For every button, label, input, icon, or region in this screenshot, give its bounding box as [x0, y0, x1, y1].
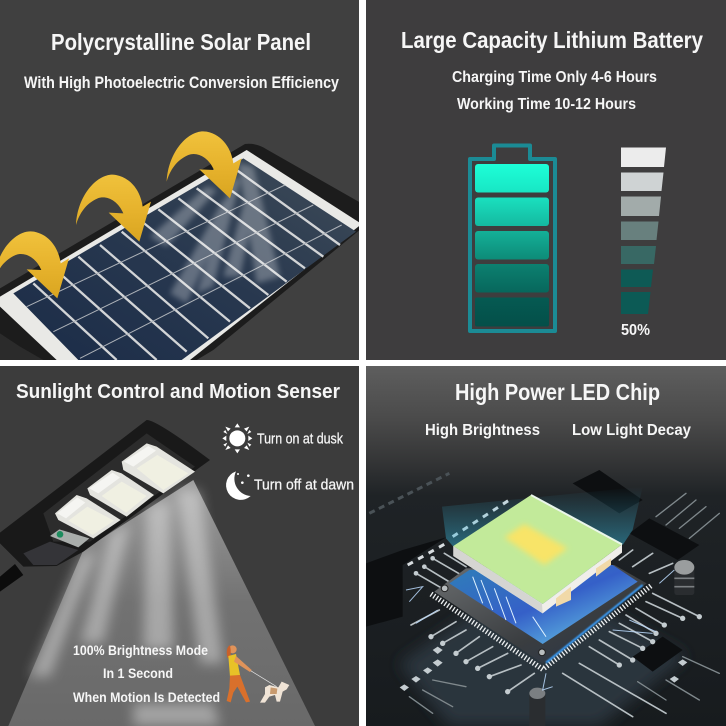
pole: [0, 564, 23, 592]
circuit board: [399, 570, 686, 726]
sensor plate: [50, 529, 89, 547]
panel: LED chip: [366, 366, 726, 726]
lightning on substrate: [473, 577, 546, 637]
chip pins: [431, 585, 652, 669]
light reflection on the panel: [150, 163, 280, 303]
arrow 3: [167, 131, 242, 198]
icon: sun: [222, 423, 252, 453]
high brightness: High Brightness: [425, 422, 540, 439]
lightning sparks: [406, 570, 674, 690]
dog: [260, 682, 289, 703]
LED hot spot: [504, 524, 568, 565]
corner screws: [441, 579, 633, 656]
LED lower side shading: [453, 546, 543, 613]
cell grid lines: [27, 170, 342, 360]
arrow 2: [76, 175, 151, 242]
blue glow: [442, 487, 643, 547]
motion text line 1: 100% Brightness Mode: [73, 642, 208, 658]
heading: sensor: Sunlight Control and Motion Senser: [16, 380, 340, 403]
blue substrate: [449, 565, 638, 644]
turn on at dusk: Turn on at dusk: [257, 430, 343, 448]
subheading: efficiency: With High Photoelectric Conversion Efficiency: [24, 74, 340, 92]
chip package: [434, 565, 647, 663]
light beam: [8, 480, 315, 726]
LED contacts: [556, 558, 611, 607]
person walking: [227, 645, 277, 702]
LED top edge highlight: [531, 495, 622, 544]
lamp housing: [0, 420, 210, 567]
street light illustration: [0, 420, 315, 726]
working time: Working Time 10-12 Hours: [457, 96, 636, 113]
white panel frame: [0, 150, 362, 360]
lamp housing behind the panel: [0, 144, 362, 360]
blue solar cells: [13, 158, 356, 360]
LED side faces: [453, 544, 622, 613]
LED top face: [453, 495, 622, 604]
motion text line 3: When Motion Is Detected: [73, 689, 220, 705]
heading: solar panel: Polycrystalline Solar Panel: [51, 29, 311, 55]
panel: sensor: [0, 366, 359, 726]
LED module 2: [87, 470, 154, 517]
lower bracket: [23, 542, 78, 565]
LED module 3: [122, 443, 195, 493]
motion text line 2: In 1 Second: [103, 665, 173, 681]
trace pads: [400, 556, 702, 694]
sensor indicator: [57, 531, 63, 538]
blue glowing edge: [546, 585, 643, 663]
panel: battery: [366, 0, 726, 360]
turn off at dawn: Turn off at dawn: [254, 476, 354, 494]
charging time: Charging Time Only 4-6 Hours: [452, 69, 657, 86]
heading: LED chip: High Power LED Chip: [455, 379, 660, 405]
LED module 1: [55, 495, 121, 538]
icon: battery: [470, 146, 555, 331]
icon: moon: [226, 471, 251, 500]
low light decay: Low Light Decay: [572, 422, 691, 439]
solar module illustration: [0, 131, 362, 360]
panel: solar panel: [0, 0, 362, 360]
circuit traces: [369, 473, 719, 717]
label: 50%: 50%: [621, 322, 650, 339]
chip illustration: [366, 470, 719, 726]
capacitor bottom: [529, 688, 545, 726]
capacitor: [674, 560, 694, 595]
arrow 1: [0, 231, 69, 298]
charge level bars: [621, 148, 666, 314]
dark board components: [366, 470, 699, 672]
